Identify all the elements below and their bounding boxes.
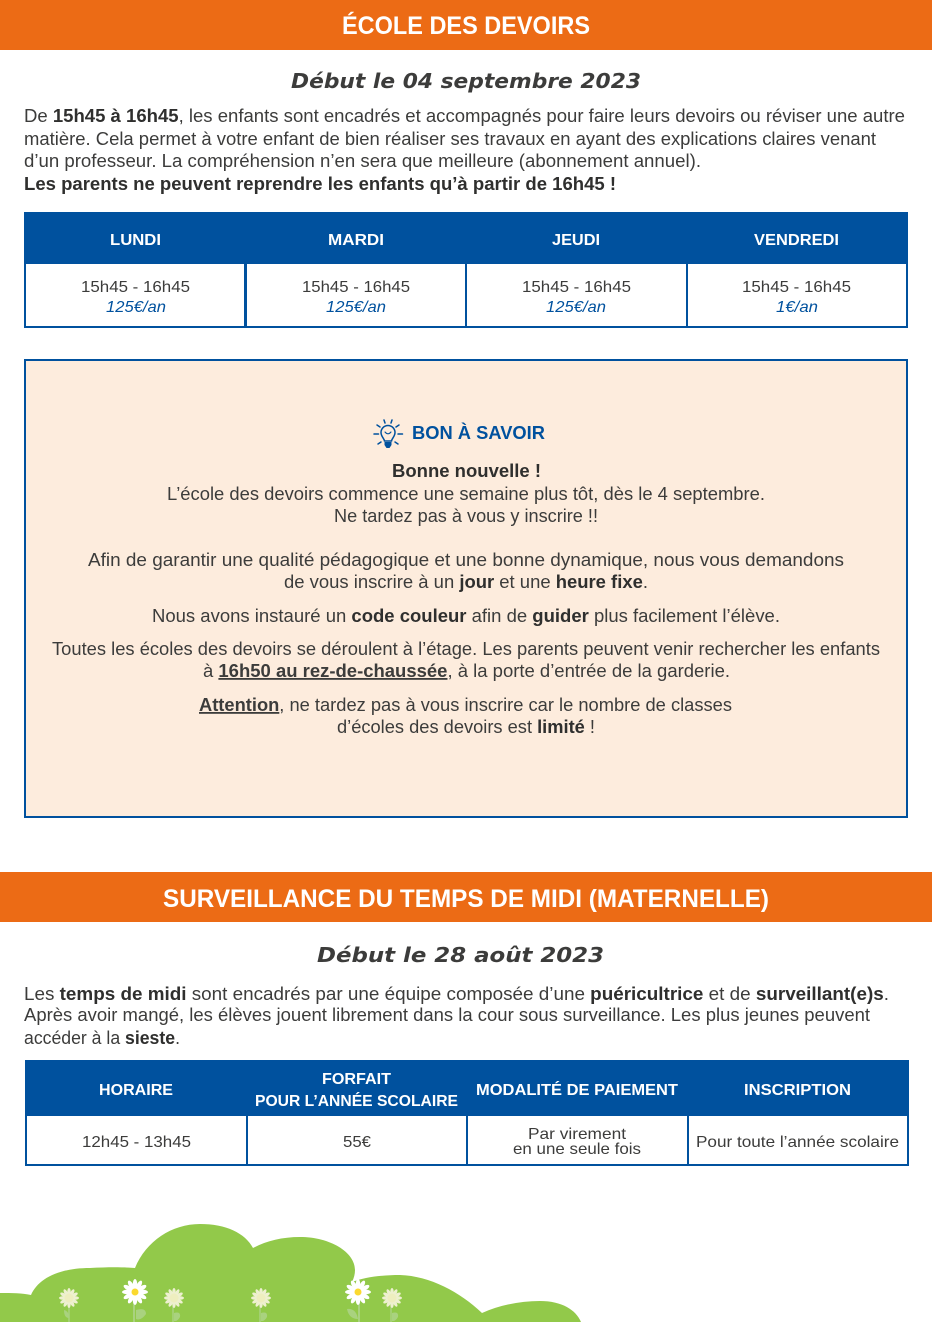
table: lunchtime supervision: 55€ <box>343 1134 371 1151</box>
table: homework schedule: 15h45 - 16h45 <box>302 279 410 296</box>
table: homework schedule <box>24 212 908 328</box>
table: lunchtime supervision: HORAIRE <box>99 1082 173 1099</box>
table: homework schedule: VENDREDI <box>754 232 839 249</box>
table: homework schedule: 15h45 - 16h45 <box>81 279 190 296</box>
table: lunchtime supervision: Par virement <box>528 1126 627 1143</box>
icon: smiling light bulb <box>374 420 402 448</box>
green hill shape <box>0 1224 581 1322</box>
table: homework schedule: 125€/an <box>326 299 386 316</box>
text block: lunchtime intro <box>24 984 889 1048</box>
text block: limited classes warning: Attention, ne tardez pas à vous inscrire car le nombre de classes <box>199 695 732 715</box>
text block: pick-up information: Toutes les écoles des devoirs se déroulent à l’étage. Les parents peuvent venir rechercher les enfants <box>52 639 880 659</box>
text block: good news <box>167 461 765 526</box>
subtitle: start date September: Début le 04 septembre 2023 <box>291 69 641 93</box>
section: école des devoirs title band: ÉCOLE DES DEVOIRS <box>342 11 590 40</box>
text block: lunchtime intro: Les temps de midi sont encadrés par une équipe composée d’une puéricultrice et de surveillant(e)s . <box>24 984 889 1004</box>
table: lunchtime supervision: POUR L’ANNÉE SCOLAIRE <box>255 1091 458 1110</box>
section: école des devoirs title band <box>0 0 932 50</box>
text block: good news: Bonne nouvelle ! <box>392 461 541 481</box>
table: homework schedule: JEUDI <box>552 232 600 249</box>
table: lunchtime supervision: en une seule fois <box>513 1141 641 1158</box>
heading: bon à savoir: BON À SAVOIR <box>412 422 545 443</box>
subtitle: start date August: Début le 28 août 2023 <box>317 943 604 967</box>
text block: pick-up information: à 16h50 au rez-de-chaussée , à la porte d’entrée de la garderie. <box>203 661 730 681</box>
text block: lunchtime intro: accéder à la sieste. <box>24 1028 180 1048</box>
table: lunchtime supervision: INSCRIPTION <box>744 1082 851 1099</box>
table: homework schedule: 125€/an <box>546 299 606 316</box>
text block: pick-up information <box>52 639 880 681</box>
table: lunchtime supervision: MODALITÉ DE PAIEMENT <box>476 1080 678 1099</box>
text block: fixed day and time <box>88 550 844 592</box>
table: lunchtime supervision: 12h45 - 13h45 <box>82 1134 191 1151</box>
illustration: green hills with daisies <box>0 1224 581 1322</box>
text block: fixed day and time: de vous inscrire à un jour et une heure fixe. <box>284 572 648 592</box>
text block: good news: Ne tardez pas à vous y inscrire !! <box>334 506 598 526</box>
table: lunchtime supervision <box>25 1060 909 1166</box>
text block: homework intro: De 15h45 à 16h45, les enfants sont encadrés et accompagnés pour faire leurs devoirs ou réviser une autre <box>24 106 905 126</box>
table: homework schedule: 1€/an <box>776 299 818 316</box>
text block: colour code: Nous avons instauré un code couleur afin de guider plus facilement l’élève. <box>152 606 780 626</box>
table: lunchtime supervision: FORFAIT <box>322 1071 391 1088</box>
text block: limited classes warning <box>199 695 732 737</box>
text block: homework intro: Les parents ne peuvent reprendre les enfants qu’à partir de 16h45 ! <box>24 174 616 194</box>
table: homework schedule: 15h45 - 16h45 <box>522 279 631 296</box>
table: homework schedule: MARDI <box>328 232 384 249</box>
section: surveillance title band <box>0 872 932 922</box>
section: surveillance title band: SURVEILLANCE DU TEMPS DE MIDI (MATERNELLE) <box>163 885 769 913</box>
text block: homework intro: d’un professeur. La compréhension n’en sera que meilleure (abonnement annuel). <box>24 151 701 171</box>
table: homework schedule: 15h45 - 16h45 <box>742 279 851 296</box>
text block: homework intro: matière. Cela permet à votre enfant de bien réaliser ses travaux en ayant des explications claires venant <box>24 129 876 149</box>
table: lunchtime supervision: Pour toute l’année scolaire <box>696 1134 899 1151</box>
text block: limited classes warning: d’écoles des devoirs est limité ! <box>337 717 595 737</box>
text block: fixed day and time: Afin de garantir une qualité pédagogique et une bonne dynamique, nous vous demandons <box>88 550 844 570</box>
table: homework schedule: LUNDI <box>110 232 161 249</box>
text block: good news: L’école des devoirs commence une semaine plus tôt, dès le 4 septembre. <box>167 484 765 504</box>
table: homework schedule: 125€/an <box>106 299 166 316</box>
text block: homework intro <box>24 106 905 194</box>
panel: bon à savoir <box>25 360 907 817</box>
daisy flowers <box>59 1279 402 1322</box>
text block: lunchtime intro: Après avoir mangé, les élèves jouent librement dans la cour sous surveillance. Les plus jeunes peuvent <box>24 1005 870 1025</box>
